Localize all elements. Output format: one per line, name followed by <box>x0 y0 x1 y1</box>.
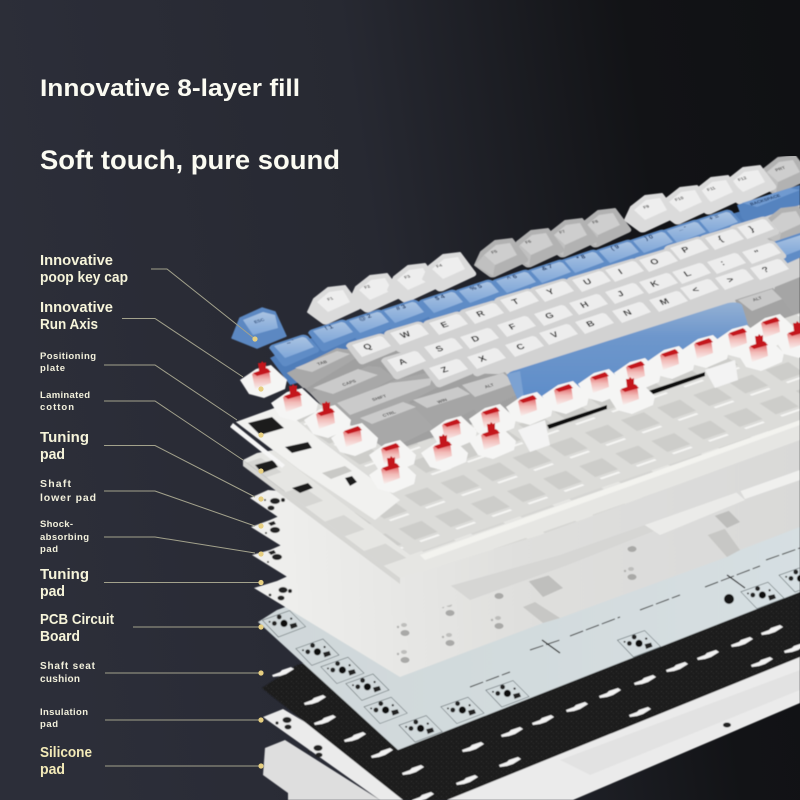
keycap layer <box>232 156 800 462</box>
callout: insulation pad <box>40 707 264 730</box>
callout: laminated cotton <box>40 390 264 474</box>
letter row Q: } <box>747 224 756 233</box>
letter row Z: > <box>725 275 736 284</box>
letter row Z: M <box>658 297 671 307</box>
number row: $ 4 <box>434 294 447 302</box>
callout: tuning pad: pad <box>40 446 65 463</box>
number row: % 5 <box>469 283 484 292</box>
callout: tuning pad: Tuning <box>40 429 89 446</box>
callout: shock-absorbing pad: pad <box>40 544 58 555</box>
layer: silicone pad <box>263 650 800 800</box>
function key row: F8 <box>591 219 600 225</box>
letter row A: : <box>718 258 727 267</box>
space bar and right alt: ALT <box>751 296 763 302</box>
letter row Q: P <box>680 245 691 255</box>
callout: shaft lower pad: lower pad <box>40 492 96 504</box>
modifier keys: CAPS <box>341 379 357 387</box>
modifier keys: WIN <box>436 397 449 404</box>
callout: PCB circuit board: Board <box>40 628 80 645</box>
number row: ( 9 <box>609 244 621 252</box>
callout: positioning plate: plate <box>40 363 65 374</box>
callout: innovative poop key cap: Innovative <box>40 252 113 269</box>
callout: tuning pad lower <box>40 566 264 600</box>
letter row A: " <box>752 248 762 257</box>
layer: positioning plate <box>230 313 800 560</box>
callout: insulation pad: Insulation <box>40 707 88 718</box>
callout: PCB circuit board: PCB Circuit <box>40 611 114 628</box>
heading: Innovative 8-layer fill: Innovative 8-layer fill <box>40 75 300 102</box>
layer: tuning pad <box>250 350 800 600</box>
callout: insulation pad: pad <box>40 719 58 730</box>
number row: * 8 <box>575 254 588 262</box>
callout: tuning pad <box>40 429 264 502</box>
callout: PCB circuit board <box>40 611 264 645</box>
letter row A: S <box>434 344 445 354</box>
letter row Q: U <box>581 277 594 287</box>
layer: PCB circuit board <box>258 420 800 750</box>
callout: positioning plate: Positioning <box>40 351 96 362</box>
modifier keys <box>287 348 530 462</box>
keyboard exploded artwork <box>230 156 800 800</box>
callout: shaft lower pad <box>40 478 264 529</box>
layer: laminated cotton <box>243 365 800 584</box>
letter row Z: V <box>549 330 561 340</box>
layer: insulation pad <box>263 650 800 800</box>
letter row Q: T <box>510 297 521 306</box>
letter row A: G <box>543 311 556 321</box>
callout: innovative poop key cap: poop key cap <box>40 269 128 286</box>
letter row Q: W <box>398 329 413 340</box>
callout: shaft seat cushion: cushion <box>40 674 80 685</box>
right side keys <box>761 207 800 264</box>
number row: ~ ` <box>285 339 297 347</box>
letter row Q: O <box>648 257 661 267</box>
function key row: F9 <box>642 204 651 210</box>
function key row: PRT <box>774 165 786 172</box>
letter row Z: C <box>514 342 527 352</box>
number row: + = <box>708 214 721 222</box>
layer: shaft lower pad <box>251 360 800 620</box>
function key row: F11 <box>706 186 717 192</box>
letter row Q: Q <box>361 342 374 352</box>
letter row Z: X <box>477 354 489 364</box>
letter row Z: ? <box>760 265 771 274</box>
function key row: F12 <box>737 176 748 182</box>
modifier keys: SHIFT <box>371 394 388 402</box>
callout: shaft seat cushion: Shaft seat <box>40 661 96 672</box>
callout: innovative run axis: Run Axis <box>40 316 98 333</box>
alpha block backing <box>345 205 800 400</box>
letter row A: H <box>578 300 591 310</box>
callout: laminated cotton: Laminated <box>40 390 90 401</box>
function key row: F4 <box>435 263 444 269</box>
callout: shock-absorbing pad: Shock- <box>40 519 73 530</box>
callout: silicone pad: Silicone <box>40 744 92 761</box>
number row: BACKSPACE <box>749 193 781 206</box>
letter row A: D <box>469 334 482 344</box>
function key row: F6 <box>524 239 533 245</box>
number row: ! 1 <box>323 324 335 332</box>
layer: shaft seat cushion <box>262 560 800 800</box>
callout: shock-absorbing pad: absorbing <box>40 532 89 543</box>
letter row Q: Y <box>545 287 557 297</box>
letter row Q <box>346 217 779 364</box>
function key row: F3 <box>403 274 412 280</box>
letter row A: A <box>396 357 409 367</box>
letter row Z: < <box>690 285 701 294</box>
number row: @ 2 <box>357 313 373 322</box>
stabilizer slits <box>547 405 607 429</box>
number row: ) 0 <box>643 234 655 242</box>
callout: silicone pad <box>40 744 264 778</box>
function key row: F5 <box>490 249 499 255</box>
letter row Q: R <box>474 309 487 319</box>
number row: # 3 <box>395 304 408 312</box>
callout: positioning plate <box>40 351 264 438</box>
letter row Z <box>423 257 794 387</box>
letter row Q: { <box>716 234 725 243</box>
callout: shock-absorbing pad <box>40 519 264 557</box>
heading: Soft touch, pure sound: Soft touch, pure sound <box>40 145 340 175</box>
function key row: F1 <box>326 296 335 302</box>
number row: ^ 6 <box>505 273 519 282</box>
letter row A: F <box>507 322 518 331</box>
letter row Q: I <box>616 268 624 276</box>
number row: & 7 <box>540 263 555 272</box>
letter row A <box>381 241 786 379</box>
callout: shaft lower pad: Shaft <box>40 478 72 490</box>
letter row Z: N <box>621 308 634 318</box>
letter row Z: B <box>584 319 597 329</box>
letter row A: L <box>682 269 693 278</box>
modifier keys: CTRL <box>382 410 397 418</box>
modifier keys: ALT <box>483 383 495 389</box>
space bar and right alt <box>507 277 800 414</box>
layer: shock-absorbing pad <box>252 380 800 647</box>
switches <box>240 314 800 493</box>
function key row: F2 <box>363 284 372 290</box>
letter row Z: Z <box>439 365 450 374</box>
callout: innovative run axis <box>40 299 264 392</box>
function key row: F7 <box>558 229 567 235</box>
callout: silicone pad: pad <box>40 761 65 778</box>
function key row: F10 <box>674 196 685 202</box>
modifier keys: TAB <box>316 359 329 366</box>
callout: innovative run axis: Innovative <box>40 299 113 316</box>
letter row A: K <box>648 279 661 289</box>
callout: tuning pad lower: Tuning <box>40 566 89 583</box>
layer: lower tuning pad <box>254 400 800 677</box>
letter row A: J <box>615 289 626 298</box>
number row: _ - <box>675 224 688 232</box>
letter row Q: E <box>439 320 450 330</box>
function key row: ESC <box>253 317 266 324</box>
callout: innovative poop key cap <box>40 252 258 342</box>
function key row <box>232 156 800 348</box>
number row <box>269 185 800 385</box>
callout: shaft seat cushion <box>40 661 264 685</box>
callout: tuning pad lower: pad <box>40 583 65 600</box>
callout: laminated cotton: cotton <box>40 402 74 413</box>
